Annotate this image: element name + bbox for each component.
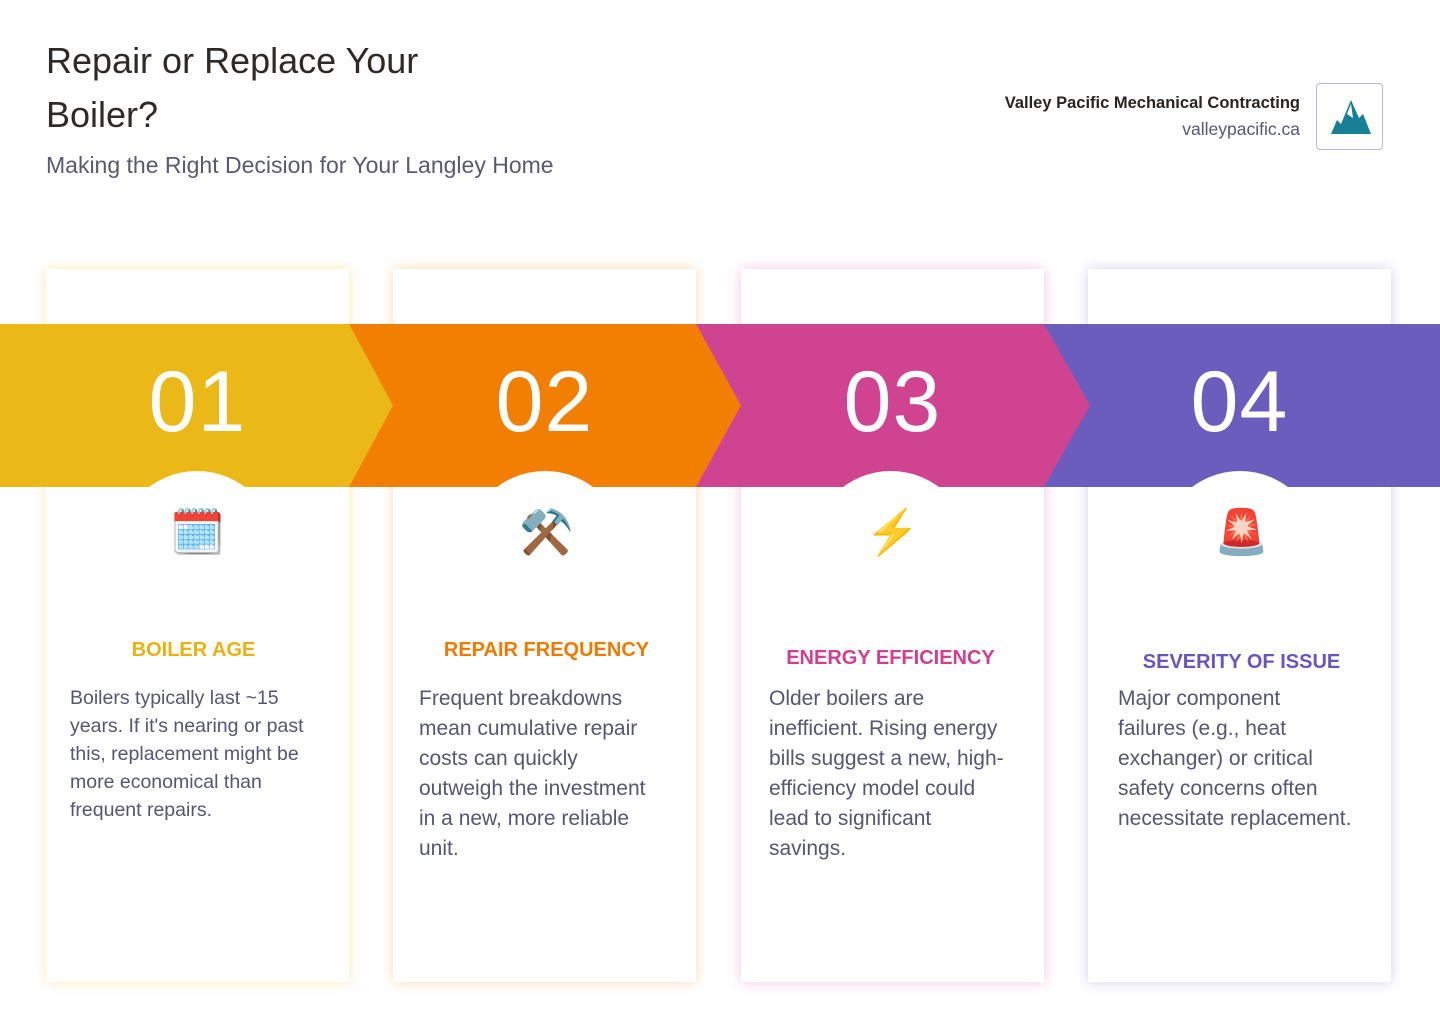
text: exchanger) or critical bbox=[1118, 747, 1313, 770]
title bbox=[46, 40, 418, 135]
text: 03 bbox=[844, 354, 941, 450]
text: mean cumulative repair bbox=[419, 717, 637, 740]
text: Major component bbox=[1118, 687, 1280, 710]
cards bbox=[46, 269, 349, 982]
text: outweigh the investment bbox=[419, 777, 645, 800]
text: more economical than bbox=[70, 771, 262, 793]
text: unit. bbox=[419, 837, 459, 860]
title: Boiler? bbox=[46, 94, 158, 135]
text: frequent repairs. bbox=[70, 799, 212, 821]
text: efficiency model could bbox=[769, 777, 975, 800]
text: necessitate replacement. bbox=[1118, 807, 1351, 830]
text: in a new, more reliable bbox=[419, 807, 629, 830]
company block bbox=[1004, 94, 1300, 139]
text: lead to significant bbox=[769, 807, 931, 830]
arrow band bbox=[0, 324, 1440, 487]
logo bbox=[1316, 83, 1383, 150]
icon circles bbox=[117, 471, 277, 631]
panel 2: REPAIR FREQUENCY bbox=[444, 639, 649, 661]
panel 4: SEVERITY OF ISSUE bbox=[1143, 651, 1340, 673]
text: Frequent breakdowns bbox=[419, 687, 622, 710]
panel 3: ENERGY EFFICIENCY bbox=[786, 647, 995, 669]
subtitle: Making the Right Decision for Your Langley Home bbox=[46, 152, 554, 178]
text: Older boilers are bbox=[769, 687, 924, 710]
company block: Valley Pacific Mechanical Contracting bbox=[1005, 94, 1300, 112]
numbers: 01 bbox=[149, 354, 246, 450]
title: Repair or Replace Your bbox=[46, 40, 418, 81]
text: ⚡ bbox=[865, 508, 920, 557]
text: Boilers typically last ~15 bbox=[70, 687, 279, 709]
text: this, replacement might be bbox=[70, 743, 299, 765]
panel 1: BOILER AGE bbox=[132, 639, 255, 661]
text: costs can quickly bbox=[419, 747, 578, 770]
text: 🚨 bbox=[1214, 508, 1269, 557]
text: bills suggest a new, high- bbox=[769, 747, 1004, 770]
text: savings. bbox=[769, 837, 846, 860]
company block: valleypacific.ca bbox=[1182, 119, 1300, 139]
text: 02 bbox=[496, 354, 593, 450]
text: 04 bbox=[1191, 354, 1288, 450]
text: years. If it's nearing or past bbox=[70, 715, 304, 737]
text: inefficient. Rising energy bbox=[769, 717, 997, 740]
icons: 🗓️ bbox=[170, 508, 225, 557]
text: safety concerns often bbox=[1118, 777, 1318, 800]
text: failures (e.g., heat bbox=[1118, 717, 1286, 740]
text: ⚒️ bbox=[519, 508, 574, 557]
